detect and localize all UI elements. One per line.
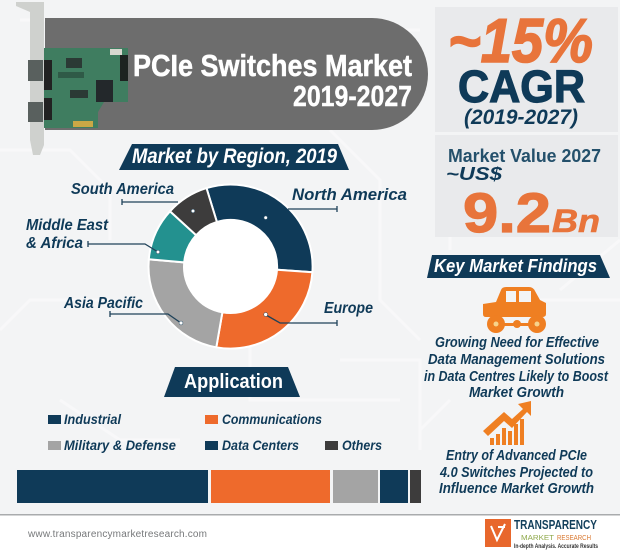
donut labels and leaders: Middle East (26, 217, 109, 234)
title banner: PCIe Switches Market (133, 48, 412, 83)
heading: application (164, 367, 300, 397)
segment: Middle East and Africa (149, 211, 196, 262)
logo: In-depth Analysis. Accurate Results (514, 544, 599, 550)
panel: market value: Bn (552, 203, 600, 239)
panel: CAGR: CAGR (458, 61, 585, 112)
text: finding two: Entry of Advanced PCIe (446, 448, 587, 464)
segment: Europe (216, 270, 312, 349)
icon: car on connected nodes (483, 287, 546, 333)
panel: market value: 9.2 (463, 181, 551, 244)
logo: MARKET (521, 535, 555, 542)
logo: RESEARCH (557, 535, 591, 542)
donut labels and leaders: North America (292, 185, 407, 204)
heading: key market findings: Key Market Findings (434, 255, 597, 276)
legend: Military & Defense (64, 438, 176, 453)
legend: Communications (222, 412, 322, 427)
icon: PCIe card (16, 2, 128, 155)
title banner (45, 18, 428, 130)
panel: market value (435, 135, 618, 244)
logo: TRANSPARENCY (514, 517, 597, 532)
text: finding two: 4.0 Switches Projected to (439, 465, 593, 481)
donut labels and leaders: Europe (324, 300, 373, 317)
panel: CAGR: (2019-2027) (464, 106, 578, 129)
text: finding one: Growing Need for Effective (435, 335, 599, 351)
text: finding one: Data Management Solutions (428, 352, 605, 368)
footer band (0, 514, 620, 552)
text: finding two (439, 448, 594, 497)
logo (485, 517, 599, 550)
donut labels and leaders (26, 181, 407, 326)
heading: application: Application (184, 371, 283, 393)
panel: market value: Market Value 2027 (448, 146, 601, 166)
segment: Asia Pacific (148, 259, 222, 347)
title banner: 2019-2027 (293, 81, 412, 113)
donut labels and leaders: South America (71, 181, 174, 198)
donut labels and leaders: & Africa (26, 235, 83, 252)
legend: Others (342, 438, 382, 453)
text: finding one: Market Growth (469, 385, 564, 401)
text: finding two: Influence Market Growth (439, 481, 594, 497)
legend: Industrial (64, 412, 121, 427)
panel: CAGR (435, 7, 618, 132)
heading: market by region: Market by Region, 2019 (132, 145, 337, 168)
legend (48, 412, 382, 453)
panel: CAGR: ~15% (448, 7, 593, 76)
footer url: www.transparencymarketresearch.com (27, 529, 207, 540)
stacked bar chart (17, 470, 421, 503)
segment: North America (206, 184, 313, 272)
segment: South America (170, 188, 217, 235)
panel: market value: ~US$ (446, 164, 503, 184)
legend: Data Centers (222, 438, 299, 453)
text: finding one (424, 335, 609, 401)
donut labels and leaders: Asia Pacific (63, 295, 143, 312)
icon: rising arrow chart (483, 401, 531, 445)
donut chart (148, 184, 313, 349)
